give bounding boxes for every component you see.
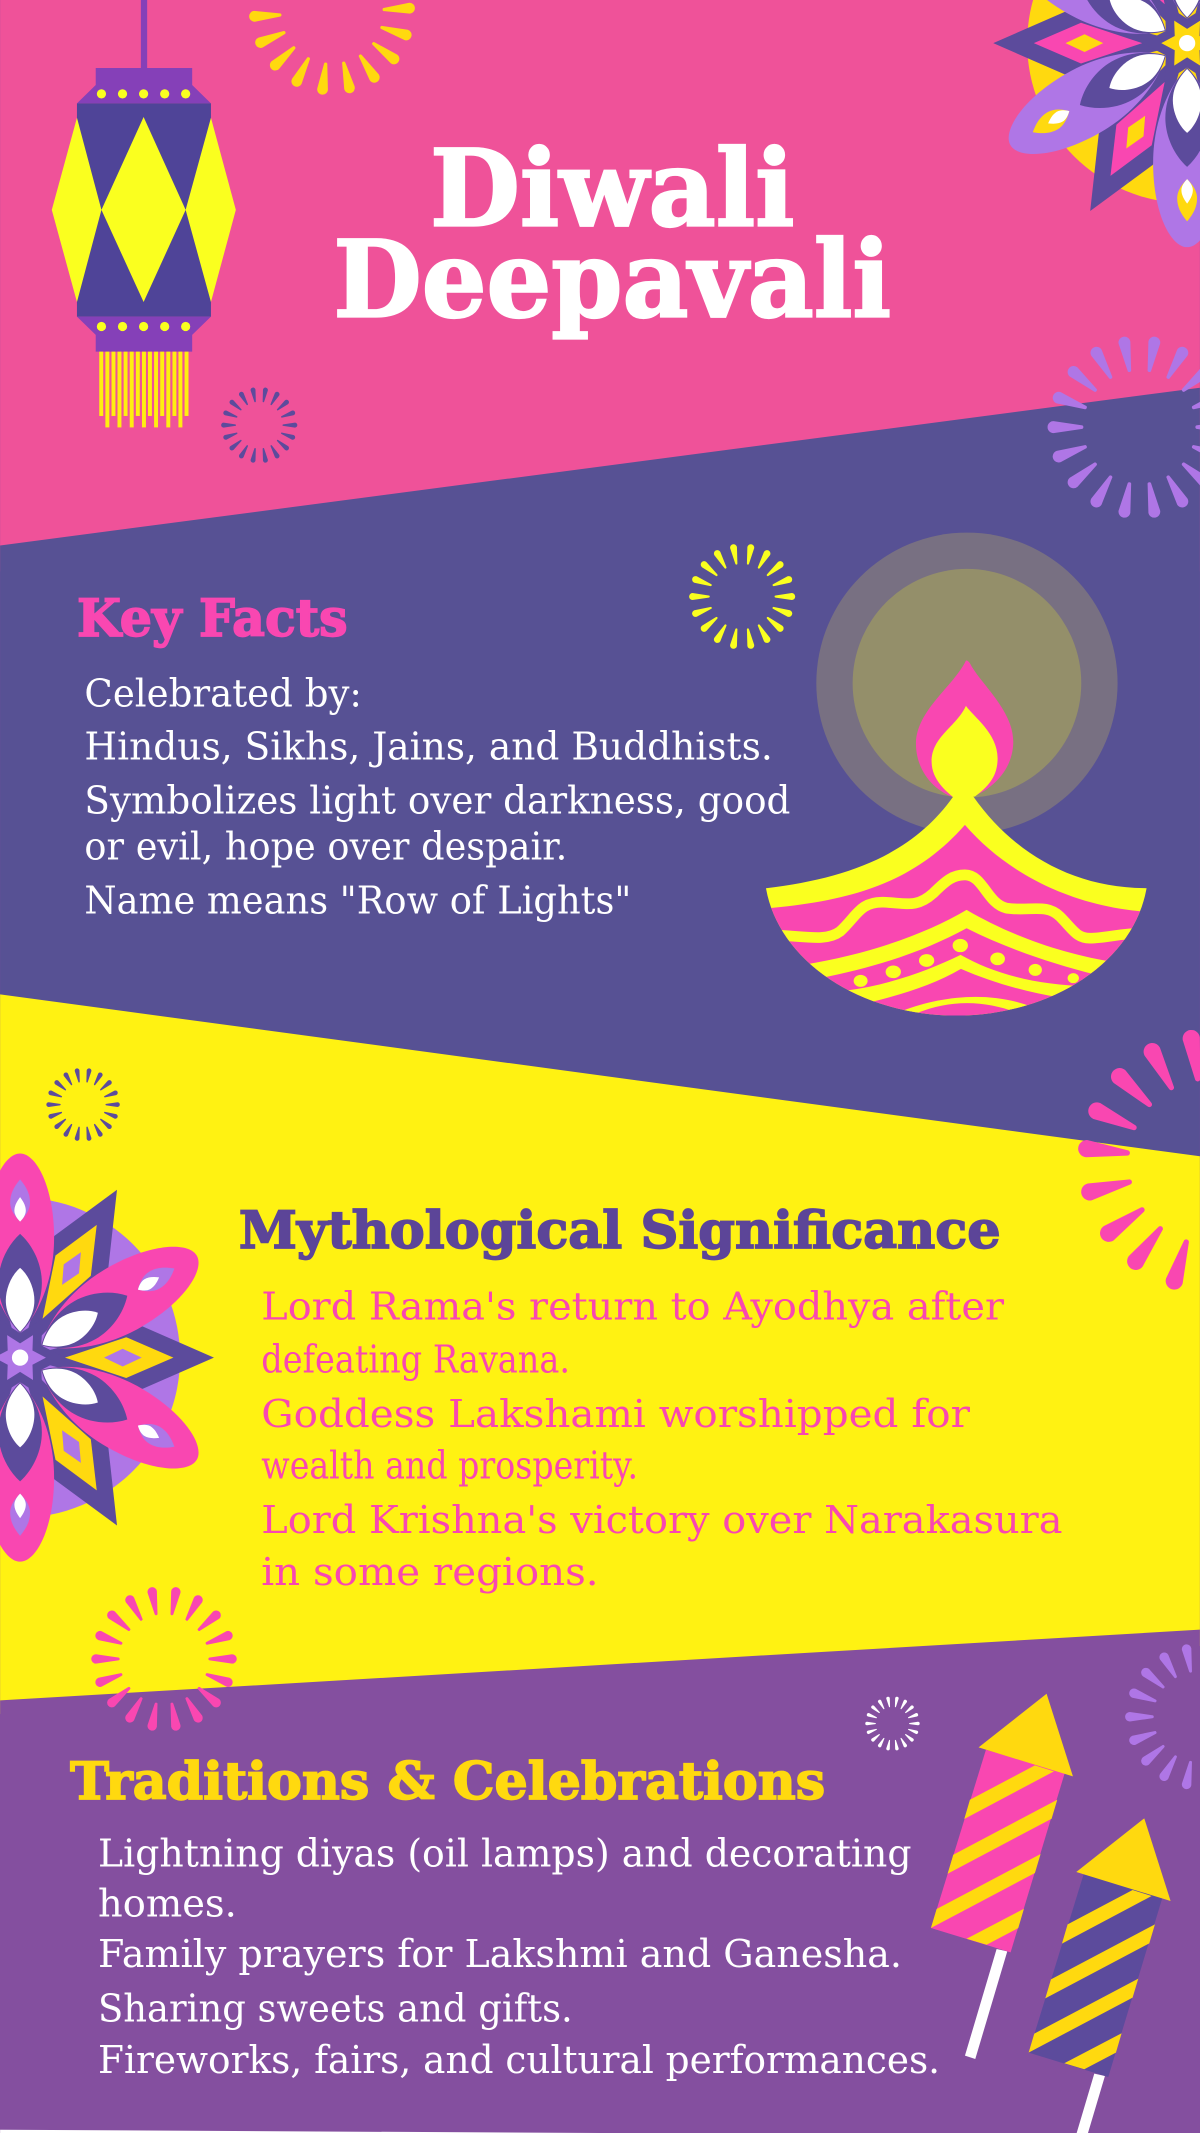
text block: mythological significance bbox=[239, 1200, 1063, 1594]
text block: key facts: Celebrated by: bbox=[84, 672, 362, 716]
text block: traditions and celebrations: Fireworks, fairs, and cultural performances. bbox=[98, 2038, 940, 2082]
panel: mythological significance band bbox=[0, 994, 1200, 1714]
icon: pink rocket bbox=[931, 1694, 1073, 2059]
icon: yellow firework bbox=[689, 544, 795, 649]
title: Diwali bbox=[430, 127, 795, 252]
icon: small navy firework bbox=[221, 387, 297, 463]
panel: key facts band bbox=[0, 388, 1200, 1170]
icon: lilac firework lower right bbox=[1125, 1644, 1200, 1790]
text block: traditions and celebrations: homes. bbox=[98, 1882, 237, 1926]
icon: mandala left bbox=[0, 1154, 214, 1562]
text block: key facts bbox=[77, 588, 790, 922]
text block: key facts: Hindus, Sikhs, Jains, and Buddhists. bbox=[84, 725, 773, 769]
text block: key facts: Symbolizes light over darkness, good bbox=[84, 778, 790, 822]
icon: diya lamp bbox=[760, 533, 1153, 1027]
title: Deepavali bbox=[333, 218, 891, 343]
heading: mythological significance: Mythological Significance bbox=[239, 1200, 1001, 1261]
title bbox=[333, 127, 891, 343]
panel: pink title background bbox=[0, 0, 1200, 571]
icon: hot pink firework right bbox=[1077, 1029, 1200, 1292]
icon: lilac firework top right bbox=[1048, 336, 1200, 519]
text block: mythological significance: in some regions. bbox=[261, 1550, 599, 1594]
icon: hot pink firework lower bbox=[91, 1586, 237, 1731]
text block: key facts: or evil, hope over despair. bbox=[84, 825, 567, 869]
icon: navy firework yellow band bbox=[46, 1068, 120, 1141]
text block: mythological significance: Lord Rama's return to Ayodhya after bbox=[261, 1285, 1005, 1329]
text block: traditions and celebrations bbox=[70, 1751, 940, 2082]
panel: traditions band bbox=[0, 1630, 1200, 2133]
text block: mythological significance: wealth and prosperity. bbox=[261, 1444, 638, 1488]
heading: traditions and celebrations: Traditions & Celebrations bbox=[70, 1751, 825, 1812]
heading: key facts: Key Facts bbox=[77, 588, 348, 649]
text block: mythological significance: Lord Krishna's victory over Narakasura bbox=[261, 1498, 1063, 1542]
text block: mythological significance: defeating Ravana. bbox=[261, 1338, 570, 1382]
text block: key facts: Name means "Row of Lights" bbox=[84, 878, 631, 922]
text block: traditions and celebrations: Lightning diyas (oil lamps) and decorating bbox=[98, 1831, 912, 1875]
icon: navy rocket bbox=[1029, 1818, 1171, 2133]
text block: mythological significance: Goddess Lakshami worshipped for bbox=[261, 1392, 971, 1436]
icon: hanging lantern bbox=[52, 0, 236, 427]
icon: white small firework bbox=[865, 1696, 920, 1751]
text block: traditions and celebrations: Family prayers for Lakshmi and Ganesha. bbox=[98, 1932, 902, 1976]
icon: mandala top right bbox=[993, 0, 1200, 247]
icon: gold firework top bbox=[245, 0, 419, 99]
text block: traditions and celebrations: Sharing sweets and gifts. bbox=[98, 1986, 573, 2030]
